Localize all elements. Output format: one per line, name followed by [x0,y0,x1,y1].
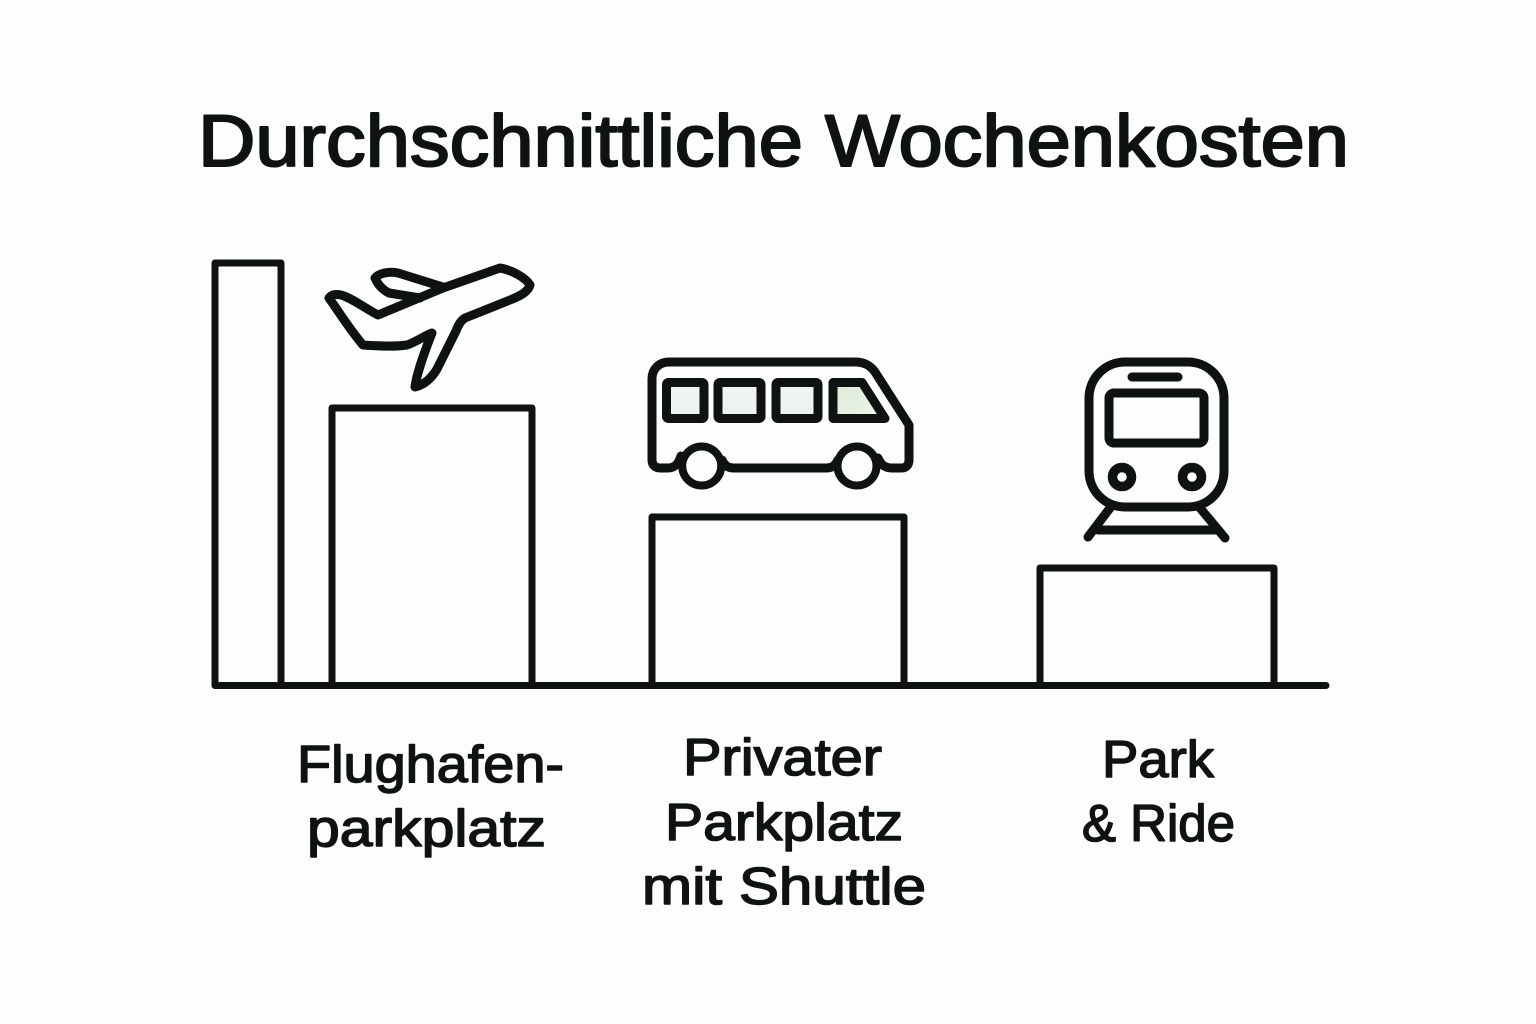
bar: Flughafenparkplatz [332,408,532,685]
bar: unlabelled tall bar [215,263,281,685]
bar chart [215,263,1326,686]
axis baseline [215,682,1326,689]
label: Flughafenparkplatz [297,736,564,858]
label: Privater Parkplatz mit Shuttle: mit Shuttle [642,858,926,916]
bar: Park & Ride [1040,568,1274,685]
label: Flughafenparkplatz: Flughafen- [297,736,564,794]
icon: train [1088,362,1225,538]
label: Flughafenparkplatz: parkplatz [307,800,546,858]
label: Park & Ride: Park [1102,731,1215,789]
icon: shuttle bus [652,362,909,486]
label: Privater Parkplatz mit Shuttle [642,729,926,916]
icon: airplane [329,268,530,387]
label: Privater Parkplatz mit Shuttle: Parkplatz [665,794,903,852]
title: Durchschnittliche Wochenkosten [198,101,1349,182]
label: Privater Parkplatz mit Shuttle: Privater [683,729,882,787]
label: Park & Ride [1082,731,1235,853]
bar: Privater Parkplatz mit Shuttle [652,517,904,685]
label: Park & Ride: & Ride [1082,795,1235,853]
